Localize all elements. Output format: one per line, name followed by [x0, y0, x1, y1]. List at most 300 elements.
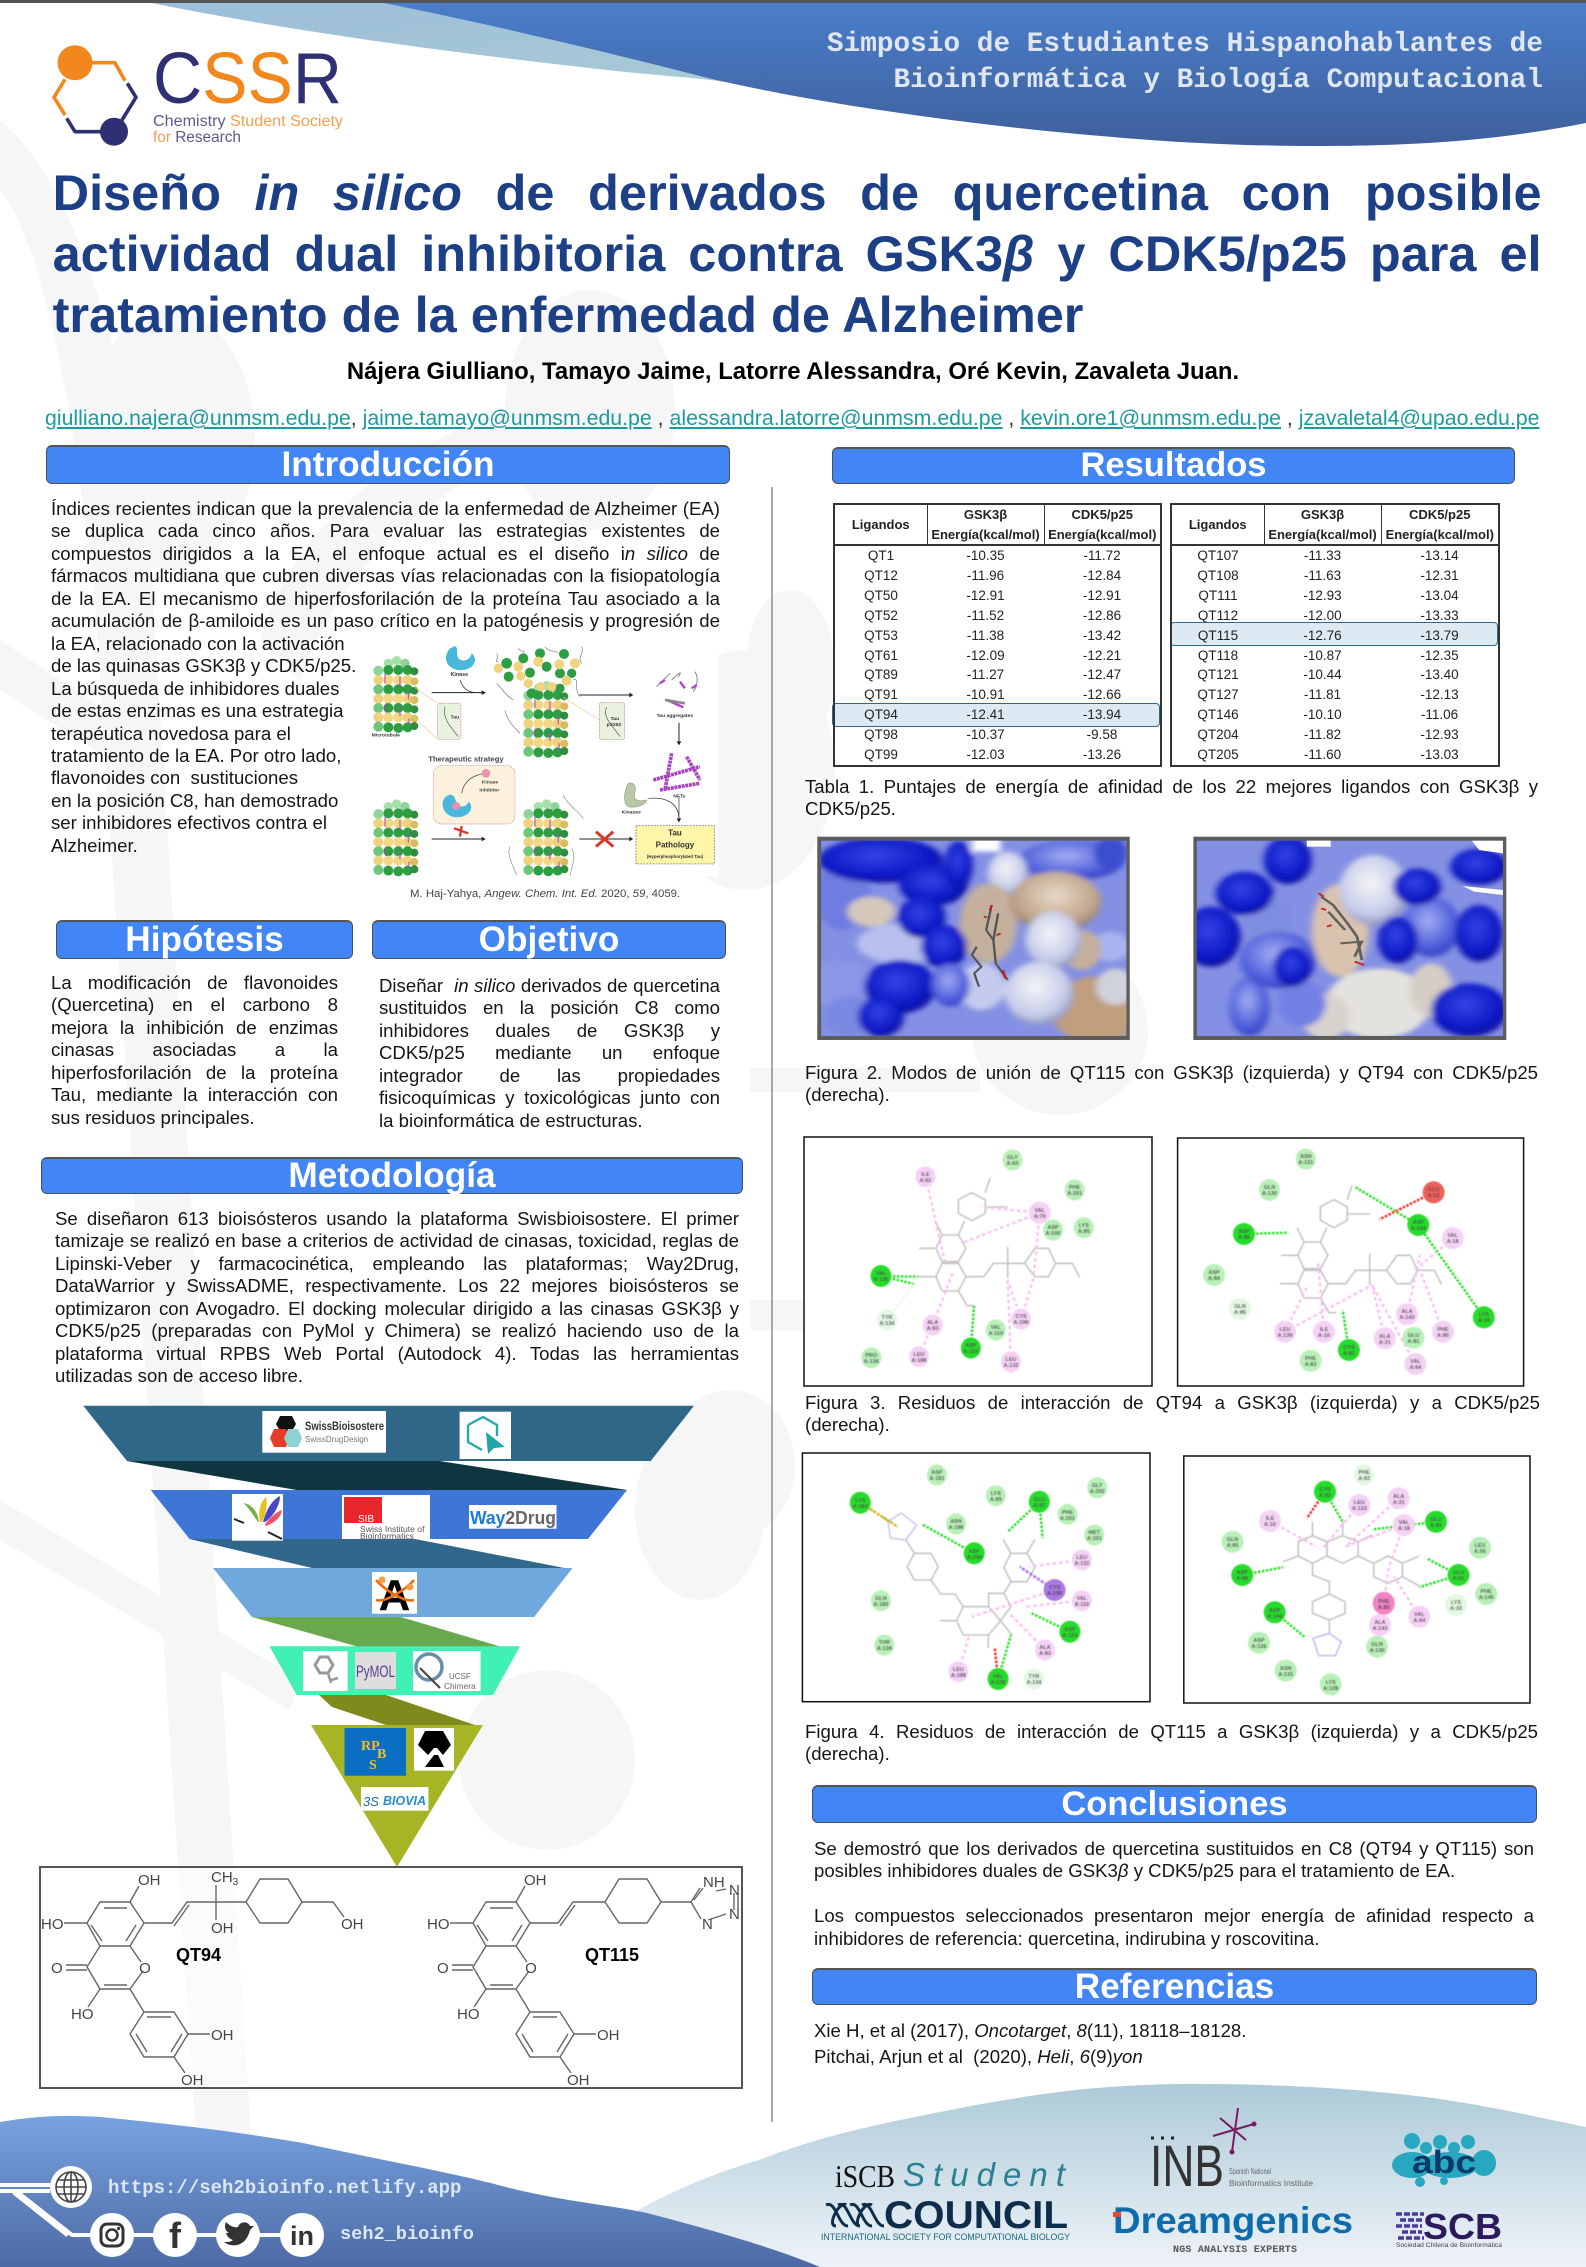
- table 1 right: Ligandos: [1189, 517, 1247, 532]
- logo: RPBS: B: [377, 1747, 386, 1762]
- figure: tau pathology scheme: [370, 640, 718, 877]
- table 1 left: -11.52: [967, 608, 1004, 623]
- icon: facebook: [153, 2213, 197, 2257]
- text: conclusions: inhibidores de referencia: quercetina, indirubina y roscovitina.: [814, 1928, 1319, 1949]
- figure 3 left: QT94 interaction map GSK3b: A:62: [919, 1178, 931, 1184]
- figure 4 right: QT115 interaction map CDK5: A:51: [1453, 1576, 1464, 1582]
- structure: QT94: O: [139, 1960, 151, 1977]
- funnel tier 5: [311, 1725, 483, 1867]
- ligand skeleton: [1283, 1522, 1419, 1656]
- table 1 right: GSK3β: [1301, 507, 1344, 522]
- figure: tau pathology scheme: Tau: [611, 716, 619, 722]
- figure 3 right: QT94 interaction map CDK5: VAL: [1447, 1233, 1458, 1239]
- table 1 right: -12.35: [1420, 648, 1459, 663]
- highlight row QT115: [1170, 622, 1498, 646]
- logo: ISCB Student Council: INTERNATIONAL SOCIETY FOR COMPUTATIONAL BIOLOGY: [821, 2231, 1071, 2242]
- figure 4 left: QT115 interaction map GSK3b: LYS: [855, 1498, 865, 1504]
- figure 4 left: QT115 interaction map GSK3b: GLN: [875, 1596, 887, 1602]
- CSSR logo: for Research: [153, 129, 241, 146]
- logo: PyMOL: [355, 1652, 396, 1689]
- table 1 left: -12.47: [1083, 667, 1121, 682]
- figure 3 left: QT94 interaction map GSK3b: A:201: [1067, 1191, 1082, 1197]
- figure 3 right: QT94 interaction map CDK5: A:139: [1278, 1333, 1292, 1339]
- figure 3 left: QT94 interaction map GSK3b: ALA: [927, 1320, 938, 1326]
- table 1 left: QT89: [864, 667, 898, 682]
- table 1 left: -12.09: [966, 648, 1005, 663]
- figure 3 left: QT94 interaction map GSK3b: A:63: [1007, 1161, 1018, 1167]
- CSSR logo: Chemistry Student Society: [153, 113, 343, 130]
- table 1 left: -12.91: [1083, 588, 1121, 603]
- figure 3 right: QT94 interaction map CDK5: ALA: [1401, 1309, 1413, 1315]
- figure 4 left: QT115 interaction map GSK3b: A:133: [1062, 1633, 1077, 1639]
- structure: QT94: OH: [211, 1920, 234, 1937]
- figure 4 right: QT115 interaction map CDK5: A:133: [1352, 1506, 1367, 1512]
- text: introduction: acumulación de β-amiloide es un paso crítico en la patogénesis y progresión de: [51, 610, 720, 631]
- panel: chemical structures: [40, 1867, 742, 2089]
- figure 3 left: QT94 interaction map GSK3b: VAL: [876, 1271, 886, 1277]
- text: conclusions: [814, 1838, 1534, 1949]
- text: introduction: [51, 498, 720, 856]
- figure 3 right: QT94 interaction map CDK5: A:86: [1238, 1235, 1250, 1241]
- table 1 right: -10.10: [1303, 707, 1342, 722]
- figure: tau pathology scheme: Kinases: [622, 809, 641, 815]
- heading: Conclusiones: [812, 1785, 1537, 1823]
- figure 3 left: QT94 interaction map GSK3b: A:132: [1004, 1363, 1018, 1369]
- text: objective: la bioinformática de estructuras.: [379, 1110, 643, 1131]
- logo: UCSF Chimera: [413, 1651, 481, 1691]
- figure 4 left: QT115 interaction map GSK3b: A:97: [1033, 1503, 1045, 1509]
- figure 4 right: QT115 interaction map CDK5: LYS: [1326, 1680, 1336, 1686]
- table 1 left: -13.94: [1083, 707, 1121, 722]
- icon: kinase: [446, 646, 475, 678]
- figure 3 right: QT94 interaction map CDK5: A:31: [1379, 1340, 1391, 1346]
- table 1 right: -12.00: [1303, 608, 1342, 623]
- heading: Objetivo: [372, 920, 726, 959]
- structure: QT115: OH: [597, 2027, 620, 2044]
- figure 4 right: QT115 interaction map CDK5: A:83: [1319, 1493, 1331, 1499]
- logo: benzene: [303, 1651, 348, 1691]
- footer contact links: seh2_bioinfo: [340, 2224, 474, 2245]
- figure 4 right: QT115 interaction map CDK5: CYS: [1319, 1487, 1331, 1493]
- text: introduction: ser inhibidores efectivos contra el: [51, 812, 327, 833]
- text: objective: sustituidos en la posición C8 como: [379, 997, 720, 1018]
- figure 4 right: QT115 interaction map CDK5: PHE: [1481, 1589, 1492, 1595]
- table 1 left: -10.91: [966, 687, 1005, 702]
- figure 4 right: QT115 interaction map CDK5: A:18: [1398, 1526, 1410, 1532]
- logo: INB: Spanish National: [1229, 2167, 1271, 2176]
- icon: facebook: f: [169, 2215, 182, 2256]
- figure 4 left: QT115 interaction map GSK3b: ASP: [969, 1549, 980, 1555]
- figure 3 right: QT94 interaction map CDK5: A:85: [1234, 1310, 1246, 1316]
- figure 4 left: QT115 interaction map GSK3b: A:132: [1074, 1561, 1089, 1567]
- figure 4 right: QT115 interaction map CDK5: A:64: [1413, 1618, 1426, 1624]
- table 1 left: QT98: [864, 727, 898, 742]
- structure: QT115: HO: [457, 2006, 480, 2023]
- figure 3 left: QT94 interaction map GSK3b: A:200: [1046, 1231, 1060, 1237]
- logo: BIOVIA: 3S: [363, 1794, 379, 1809]
- logo: SCB: [1396, 2206, 1502, 2249]
- structure: QT94: OH: [211, 2027, 234, 2044]
- table 1 right: -13.79: [1420, 628, 1459, 643]
- caption: table 1: [805, 776, 1538, 819]
- figure 4 right: QT115 interaction map CDK5: LEU: [1354, 1500, 1365, 1506]
- logo: RPBS: RP: [361, 1739, 380, 1754]
- figure 3 right: QT94 interaction map CDK5: LEU: [1280, 1327, 1290, 1333]
- funnel tier 2: [151, 1490, 627, 1541]
- figure 3 right: QT94 interaction map CDK5: A:64: [1409, 1365, 1422, 1371]
- footer left wave: [0, 2116, 820, 2267]
- table 1 right: -12.76: [1303, 628, 1342, 643]
- table 1 right: -13.04: [1420, 588, 1459, 603]
- structure: QT115: NH: [703, 1874, 725, 1891]
- text: hypothesis: La modificación de flavonoides: [51, 972, 338, 993]
- table 1 right: -11.60: [1304, 747, 1341, 762]
- figure 4 right: QT115 interaction map CDK5: [1184, 1456, 1530, 1703]
- table 1 right: -13.14: [1420, 548, 1459, 563]
- figure 3 right: QT94 interaction map CDK5: ASP: [1238, 1229, 1250, 1235]
- table 1 right: QT146: [1197, 707, 1239, 722]
- figure 3 left: QT94 interaction map GSK3b: A:135: [874, 1277, 888, 1283]
- figure 4 right: QT115 interaction map CDK5: ASP: [1237, 1570, 1248, 1576]
- heading: Referencias: [812, 1968, 1537, 2005]
- table 1 right: QT204: [1197, 727, 1239, 742]
- table 1 left: -11.72: [1083, 548, 1121, 563]
- table 1 right: -11.63: [1304, 568, 1341, 583]
- figure 3 left: QT94 interaction map GSK3b: [804, 1137, 1152, 1386]
- figure 4 right: QT115 interaction map CDK5: VAL: [1414, 1612, 1425, 1618]
- caption: figure 3: Figura 3. Residuos de interacción de QT94 a GSK3β (izquierda) y a CDK5/p25: [805, 1392, 1540, 1413]
- logo: feather: [232, 1494, 283, 1541]
- table 1 left: QT50: [864, 588, 898, 603]
- caption: figure 2: [805, 1062, 1538, 1105]
- figure 4 left: QT115 interaction map GSK3b: ASP: [1064, 1627, 1076, 1633]
- figure 3 right: QT94 interaction map CDK5: ASP: [1208, 1270, 1220, 1276]
- figure 4 left: QT115 interaction map GSK3b: A:202: [1090, 1489, 1105, 1495]
- table 1 right: Energía(kcal/mol): [1386, 526, 1494, 542]
- figure 3 left: QT94 interaction map GSK3b: LEU: [914, 1352, 924, 1358]
- caption: table 1: Tabla 1. Puntajes de energía de afinidad de los 22 mejores ligandos con GSK3β y: [805, 776, 1538, 797]
- logo: PyMOL: PyMOL: [356, 1662, 395, 1681]
- figure 4 left: QT115 interaction map GSK3b: A:199: [1047, 1591, 1062, 1597]
- figure 3 left: QT94 interaction map GSK3b: CYS: [1015, 1314, 1027, 1320]
- footer contact links: [0, 2166, 474, 2257]
- table 1 left: -12.41: [966, 707, 1005, 722]
- table 1 left: QT12: [864, 568, 898, 583]
- heading: Metodología: Metodología: [288, 1156, 496, 1195]
- table 1 left: -11.38: [967, 628, 1004, 643]
- logo: ABC: [1392, 2133, 1496, 2187]
- figure 3 left: QT94 interaction map GSK3b: A:85: [1078, 1229, 1090, 1235]
- logo: SCB: Sociedad Chilena de Bioinformática: [1396, 2242, 1502, 2249]
- text: introduction: Índices recientes indican que la prevalencia de la enfermedad de Alzheimer (EA): [51, 498, 720, 519]
- heading: Resultados: [832, 447, 1515, 484]
- caption: figure 3: (derecha).: [805, 1414, 890, 1435]
- figure 4 left: QT115 interaction map GSK3b: A:181: [929, 1476, 944, 1482]
- text: introduction: en la posición C8, han demostrado: [51, 790, 338, 811]
- logo: SIB: SIB: [358, 1514, 374, 1525]
- figure 4 left: QT115 interaction map GSK3b: A:101: [1087, 1536, 1102, 1542]
- therapeutic strategy: Therapeutic strategy: [428, 755, 504, 764]
- figure 4 left: QT115 interaction map GSK3b: PHE: [1062, 1510, 1073, 1516]
- text: objective: CDK5/p25 mediante un enfoque: [379, 1042, 720, 1063]
- figure 3 right: QT94 interaction map CDK5: GLU: [1428, 1187, 1439, 1193]
- text: methodology: DataWarrior y SwissADME, respectivamente. Los 22 mejores bioisósteros se: [55, 1275, 739, 1296]
- text: hypothesis: Tau, mediante la interacción con: [51, 1084, 338, 1105]
- text: references: Pitchai, Arjun et al (2020), Heli, 6(9)yon: [814, 2046, 1143, 2067]
- figure 4 left: QT115 interaction map GSK3b: A:110: [1075, 1602, 1089, 1608]
- table 1 left: [833, 503, 1162, 767]
- table 1 left: GSK3β: [964, 507, 1007, 522]
- structure: QT94: HO: [71, 2006, 94, 2023]
- CSSR logo: CSSR: [153, 39, 342, 119]
- scattered tubulin: [494, 648, 580, 698]
- structure: QT94: OH: [138, 1872, 160, 1889]
- text: introduction: flavonoides con sustituciones: [51, 767, 298, 788]
- figure 3 left: QT94 interaction map GSK3b: GLY: [1007, 1155, 1018, 1161]
- figure 3 left: QT94 interaction map GSK3b: A:136: [864, 1359, 879, 1365]
- text: methodology: Lipinski-Veber y farmacocinética, empleando las plataformas; Way2Drug,: [55, 1253, 739, 1274]
- figure 3 left: QT94 interaction map GSK3b: ASP: [965, 1343, 977, 1349]
- figure 4 left: QT115 interaction map GSK3b: MET: [1088, 1530, 1100, 1536]
- figure 4 right: QT115 interaction map CDK5: A:10: [1264, 1522, 1276, 1528]
- authors: Nájera Giulliano, Tamayo Jaime, Latorre Alessandra, Oré Kevin, Zavaleta Juan.: [347, 358, 1239, 385]
- figure: tau pathology scheme: Tau: [451, 714, 459, 720]
- table 1 right: -12.31: [1420, 568, 1459, 583]
- main title: [53, 164, 1542, 343]
- figure 3 left: QT94 interaction map GSK3b: A:83: [927, 1326, 939, 1332]
- text: hypothesis: cinasas asociadas a la: [51, 1039, 338, 1060]
- figure 4 left: QT115 interaction map GSK3b: VAL: [1077, 1596, 1087, 1602]
- figure 4 left: QT115 interaction map GSK3b: ASN: [950, 1519, 962, 1525]
- figure 4 left: QT115 interaction map GSK3b: A:188: [951, 1673, 966, 1679]
- heading: Conclusiones: Conclusiones: [1061, 1785, 1288, 1823]
- table 1 left: -9.58: [1087, 727, 1117, 742]
- logo: UCSF Chimera: Chimera: [444, 1681, 476, 1691]
- text: conclusions: Se demostró que los derivados de quercetina sustituidos en C8 (QT94 y QT115) son: [814, 1838, 1534, 1859]
- figure 3 left: QT94 interaction map GSK3b: VAL: [1035, 1208, 1045, 1214]
- figure 3 right: QT94 interaction map CDK5: A:83: [1343, 1351, 1355, 1357]
- logo: INB: INB: [1150, 2134, 1224, 2199]
- structure: QT94: QT94: [176, 1945, 221, 1965]
- figure 4 left: QT115 interaction map GSK3b: A:183: [853, 1504, 868, 1510]
- heading: Introducción: [46, 445, 730, 484]
- table 1 right: CDK5/p25: [1409, 507, 1470, 522]
- table 1 left: QT94: [864, 707, 898, 722]
- figure 4 right: QT115 interaction map CDK5: LYS: [1451, 1600, 1461, 1606]
- logo: ABC: abc: [1412, 2144, 1476, 2180]
- figure 4 right: QT115 interaction map CDK5: ALA: [1374, 1620, 1386, 1626]
- logo: Avogadro: A: [379, 1571, 410, 1620]
- figure 4 left: QT115 interaction map GSK3b: A:200: [967, 1555, 982, 1561]
- figure 3 right: QT94 interaction map CDK5: A:81: [1408, 1339, 1419, 1345]
- figure 4 left: QT115 interaction map GSK3b: A:138: [877, 1646, 892, 1652]
- figure 3 right: QT94 interaction map CDK5: PHE: [1437, 1327, 1449, 1333]
- text: conclusions: posibles inhibidores duales de GSK3β y CDK5/p25 para el tratamiento de EA.: [814, 1860, 1455, 1881]
- figure 3 right: QT94 interaction map CDK5: A:33: [1478, 1318, 1490, 1324]
- logo: BIOVIA: BIOVIA: [383, 1794, 426, 1808]
- figure 3 right: QT94 interaction map CDK5: PHE: [1305, 1356, 1316, 1362]
- ligand skeleton: [888, 1513, 1035, 1648]
- funnel connectors: [127, 1461, 627, 1725]
- figure 4 right: QT115 interaction map CDK5: A:145: [1479, 1595, 1494, 1601]
- figure 4 right: QT115 interaction map CDK5: A:128: [1323, 1686, 1338, 1692]
- figure 4 left: QT115 interaction map GSK3b: GLY: [1092, 1483, 1103, 1489]
- table 1 right: -12.13: [1420, 687, 1459, 702]
- table 1 left: -11.27: [967, 667, 1004, 682]
- figure 3 left: QT94 interaction map GSK3b: PRO: [865, 1353, 877, 1359]
- table 1 right: -13.40: [1420, 667, 1459, 682]
- figure: tau pathology scheme: Tau aggregates: [657, 713, 693, 719]
- text: introduction: La búsqueda de inhibidores duales: [51, 678, 339, 699]
- caption: table 1: CDK5/p25.: [805, 798, 896, 819]
- structure: QT94: OH: [341, 1916, 364, 1933]
- table 1 right: QT205: [1197, 747, 1239, 762]
- figure 4 right: QT115 interaction map CDK5: A:31: [1393, 1500, 1405, 1506]
- figure 4 right: QT115 interaction map CDK5: A:81: [1430, 1523, 1442, 1529]
- figure 4 left: QT115 interaction map GSK3b: A:201: [1060, 1516, 1075, 1522]
- figure: tau pathology scheme: NFTs: [673, 793, 686, 799]
- table 1 right: QT111: [1198, 588, 1238, 603]
- main title: tratamiento de la enfermedad de Alzheimer: [53, 286, 1083, 343]
- text: methodology: Se diseñaron 613 bioisósteros usando la plataforma Swisbioisostere. El primer: [55, 1208, 739, 1229]
- logo: ISCB Student Council: iSCB: [835, 2158, 895, 2194]
- structure: QT94: O: [51, 1960, 63, 1977]
- figure 3 right: QT94 interaction map CDK5: A:18: [1447, 1239, 1459, 1245]
- figure 3 right: QT94 interaction map CDK5: GLU: [1408, 1333, 1419, 1339]
- table 1 right: -13.03: [1420, 747, 1459, 762]
- structure: QT115: [427, 1872, 740, 2089]
- figure 4 right: QT115 interaction map CDK5: ASP: [1269, 1608, 1280, 1614]
- table 1 right: QT107: [1197, 548, 1239, 563]
- logo: BIOVIA: [361, 1787, 428, 1811]
- figure 4 left: QT115 interaction map GSK3b: A:135: [991, 1680, 1006, 1686]
- figure 4 right: QT115 interaction map CDK5: GLU: [1430, 1517, 1442, 1523]
- table 1 right: Energía(kcal/mol): [1268, 526, 1377, 542]
- structure: QT115: N: [729, 1906, 740, 1923]
- figure 4 left: QT115 interaction map GSK3b: CYS: [1049, 1585, 1060, 1591]
- table 1 right: [1170, 503, 1500, 767]
- figure 3 right: QT94 interaction map CDK5: GLN: [1264, 1185, 1275, 1191]
- figure 4 left: QT115 interaction map GSK3b: A:85: [990, 1497, 1002, 1503]
- figure 3 right: QT94 interaction map CDK5: ASP: [1413, 1220, 1424, 1226]
- icon: twitter: [216, 2213, 260, 2257]
- main title: actividad dual inhibitoria contra GSK3β y CDK5/p25 para el: [53, 225, 1542, 282]
- NFT fibrils: [653, 753, 700, 790]
- figure 4 right: QT115 interaction map CDK5: ASP: [1253, 1638, 1265, 1644]
- text: hypothesis: sus residuos principales.: [51, 1107, 255, 1128]
- figure 3 right: QT94 interaction map CDK5: ASN: [1300, 1154, 1312, 1160]
- figure 4 left: QT115 interaction map GSK3b: TYR: [1028, 1674, 1040, 1680]
- figure 3 left: QT94 interaction map GSK3b: ILE: [921, 1172, 930, 1178]
- logo: ISCB Student Council: [821, 2156, 1071, 2242]
- logo: DataWarrior cursor: [460, 1412, 511, 1459]
- logo: SwissBioisostere: [262, 1411, 386, 1453]
- ligand skeleton: [1280, 1185, 1442, 1313]
- text: hypothesis: [51, 972, 338, 1128]
- figure 4 right: QT115 interaction map CDK5: A:85: [1227, 1543, 1239, 1549]
- logo: SwissBioisostere: SwissDrugDesign: [305, 1435, 368, 1444]
- background watermark: [0, 120, 1148, 2200]
- figure 3 left: QT94 interaction map GSK3b: LEU: [1006, 1357, 1016, 1363]
- figure 3 left: QT94 interaction map GSK3b: TYR: [882, 1315, 892, 1321]
- heading: Hipótesis: Hipótesis: [125, 920, 284, 959]
- structure: QT94: HO: [41, 1916, 64, 1933]
- figure 3 right: QT94 interaction map CDK5: A:80: [1437, 1333, 1449, 1339]
- structure: QT115: N: [702, 1916, 713, 1933]
- funnel diagram of tools: [83, 1406, 694, 1867]
- logo: Dreamgenics: NGS ANALYSIS EXPERTS: [1173, 2245, 1297, 2256]
- text: objective: integrador de las propiedades: [379, 1065, 720, 1086]
- structure: QT115: OH: [524, 1872, 546, 1889]
- figure 4 right: QT115 interaction map CDK5: A:80: [1378, 1605, 1390, 1611]
- figure 4 right: QT115 interaction map CDK5: A:144: [1267, 1614, 1283, 1620]
- text: methodology: optimizaron con Avogadro. El docking molecular dirigido a las cinasas GSK3β y: [55, 1298, 739, 1319]
- structure: QT115: O: [437, 1960, 449, 1977]
- text: objective: Diseñar in silico derivados de quercetina: [379, 975, 720, 996]
- icon: linkedin: [280, 2213, 324, 2257]
- figure 3 left: QT94 interaction map GSK3b: A:110: [988, 1331, 1003, 1337]
- logo: RPBS: S: [369, 1758, 377, 1773]
- highlight row QT94: [832, 703, 1160, 727]
- logo: Way2Drug: Way2Drug: [470, 1507, 556, 1528]
- text: introduction: la EA, relacionado con la activación: [51, 633, 345, 654]
- figure 4 left: QT115 interaction map GSK3b: THR: [879, 1640, 890, 1646]
- figure 2 left: binding pose GSK3b: [804, 837, 1142, 1043]
- table 1 left: -12.66: [1083, 687, 1121, 702]
- table 1 right: -11.33: [1304, 548, 1341, 563]
- logo: AutoDock: [414, 1728, 454, 1771]
- heading: Metodología: [41, 1157, 743, 1194]
- figure 4 left: QT115 interaction map GSK3b: LYS: [991, 1491, 1001, 1497]
- table 1 left: -13.42: [1083, 628, 1121, 643]
- figure 4 left: QT115 interaction map GSK3b: A:186: [949, 1525, 963, 1531]
- text: references: [814, 2020, 1246, 2067]
- text: objective: fisicoquímicas y toxicológicas junto con: [379, 1087, 720, 1108]
- table 1 left: -12.91: [966, 588, 1005, 603]
- figure 4 right: QT115 interaction map CDK5: PHE: [1378, 1599, 1389, 1605]
- logo: SCB: SCB: [1423, 2206, 1502, 2247]
- table 1 right: -12.93: [1420, 727, 1459, 742]
- logo: ISCB Student Council: COUNCIL: [884, 2194, 1068, 2237]
- figure 3 right: QT94 interaction map CDK5: A:82: [1305, 1362, 1317, 1368]
- structure: QT115: OH: [567, 2072, 590, 2089]
- table 1 left: -12.21: [1083, 648, 1121, 663]
- logo: UCSF Chimera: UCSF: [449, 1672, 471, 1681]
- figure 3 right: QT94 interaction map CDK5: A:84: [1208, 1276, 1221, 1282]
- table 1 right: -10.44: [1303, 667, 1342, 682]
- heading: Introducción: Introducción: [281, 445, 495, 484]
- caption: figure 4: (derecha).: [805, 1743, 890, 1764]
- figure 4 right: QT115 interaction map CDK5: GLN: [1371, 1642, 1383, 1648]
- figure 3 right: QT94 interaction map CDK5: A:12: [1428, 1193, 1440, 1199]
- table 1 right: -11.82: [1304, 727, 1341, 742]
- figure 4 right: QT115 interaction map CDK5: A:33: [1450, 1606, 1462, 1612]
- figure 3 right: QT94 interaction map CDK5: A:10: [1318, 1333, 1330, 1339]
- structure: QT94: [41, 1869, 364, 2089]
- text: introduction: compuestos dirigidos a la EA, el enfoque actual es el diseño in silico de: [51, 543, 720, 564]
- symposium title text: [827, 29, 1543, 96]
- heading: Hipótesis: [56, 920, 353, 959]
- therapeutic strategy: [428, 755, 515, 824]
- text: introduction: Alzheimer.: [51, 835, 138, 856]
- figure 4 right: QT115 interaction map CDK5: A:126: [1252, 1644, 1266, 1650]
- figure 4 left: QT115 interaction map GSK3b: [802, 1453, 1150, 1702]
- figure 3 left: QT94 interaction map GSK3b: PHE: [1069, 1185, 1080, 1191]
- therapeutic strategy: inhibitor: [479, 787, 499, 793]
- table 1 right: QT118: [1198, 648, 1238, 663]
- figure 3 left: QT94 interaction map GSK3b: A:133: [963, 1349, 978, 1355]
- text: introduction: fármacos multidiana que cubren diversas vías relacionadas con la fisiopatología: [51, 565, 720, 586]
